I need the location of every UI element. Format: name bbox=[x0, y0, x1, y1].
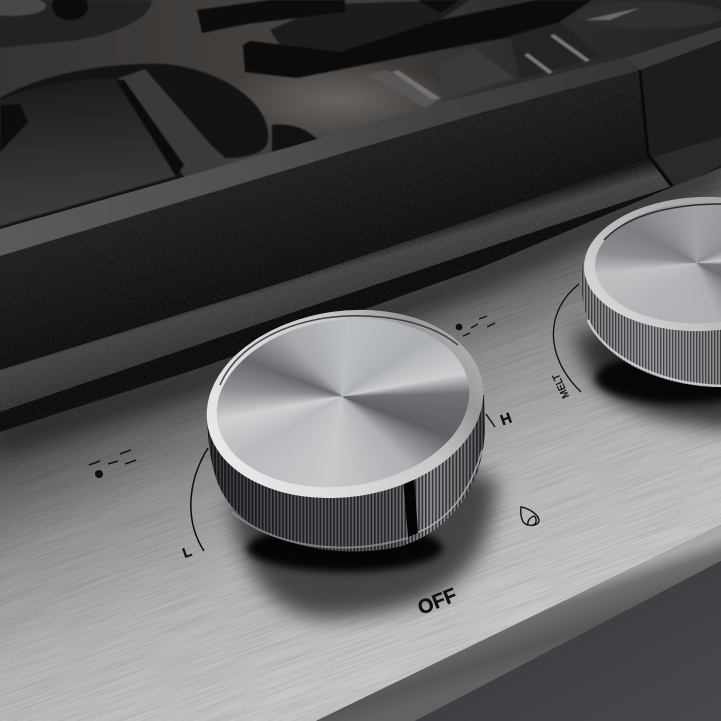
stainless panel bbox=[0, 168, 721, 721]
knob top: brushed disc bbox=[206, 303, 480, 503]
label: H: H bbox=[498, 410, 514, 429]
label: L: L bbox=[180, 543, 194, 561]
knob base shadow bbox=[247, 524, 443, 572]
front bevel bbox=[316, 525, 721, 721]
knob top: right, brushed disc bbox=[593, 199, 721, 327]
burner cap with cast bar bbox=[0, 64, 318, 240]
right flame level icon bbox=[456, 316, 495, 336]
counter bbox=[415, 561, 721, 721]
knob: right bbox=[582, 193, 721, 404]
knob skirt with knurling bbox=[207, 395, 485, 551]
high tick bbox=[486, 414, 495, 427]
background: burner deck bbox=[0, 0, 721, 300]
knob rim bbox=[194, 293, 496, 515]
pointer notch bbox=[403, 476, 418, 537]
right lip block bbox=[627, 27, 721, 190]
label: MELT: MELT bbox=[551, 372, 572, 400]
cast iron front lip bbox=[0, 57, 670, 432]
melt arc bbox=[553, 284, 581, 392]
ledge bbox=[0, 71, 670, 430]
grate bars bbox=[197, 0, 721, 108]
shadow on steel bbox=[0, 168, 721, 619]
deck light reflection bbox=[220, 60, 460, 140]
icon: flame bbox=[521, 507, 539, 525]
knob: main bbox=[194, 293, 496, 572]
low arc bbox=[191, 448, 208, 551]
brushed texture bbox=[0, 168, 721, 721]
label: OFF: OFF bbox=[415, 584, 460, 620]
burner ring, top left bbox=[0, 0, 152, 48]
left flame level icon bbox=[89, 450, 136, 478]
